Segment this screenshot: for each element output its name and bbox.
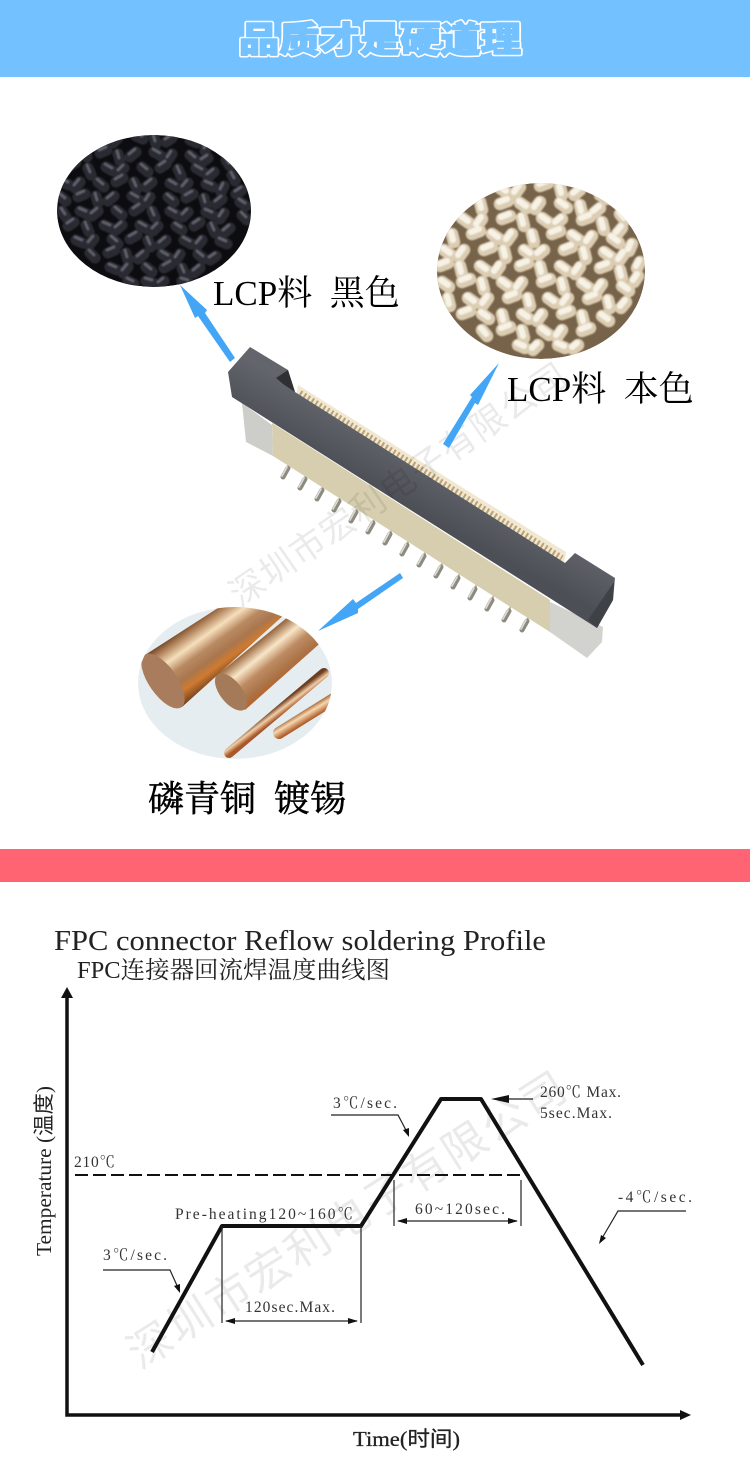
header banner bbox=[0, 0, 750, 77]
photo: natural LCP pellets bbox=[437, 181, 645, 359]
left metal tab bbox=[242, 403, 273, 456]
label preheat time: 120sec.Max. bbox=[245, 1299, 335, 1316]
photo: phosphor bronze rods bbox=[138, 607, 332, 759]
label cooling rate: -4℃/sec. bbox=[618, 1189, 692, 1206]
connector product photo bbox=[228, 347, 615, 658]
axes bbox=[61, 987, 691, 1420]
heading: quality title: 品质才是硬道理 bbox=[239, 21, 521, 60]
big copper rod bbox=[141, 607, 282, 708]
preheat dimension bbox=[222, 1226, 361, 1324]
label lower rate: 3℃/sec. bbox=[103, 1247, 167, 1264]
callout arrow peak bbox=[491, 1095, 533, 1103]
red divider band bbox=[0, 849, 750, 882]
dark actuator bar bbox=[228, 347, 615, 628]
callout leader cooling bbox=[599, 1211, 686, 1244]
x axis label: Time(时间) bbox=[353, 1427, 460, 1451]
cream contact strip bbox=[296, 385, 566, 565]
label upper rate: 3℃/sec. bbox=[333, 1095, 397, 1112]
chart: reflow soldering profile bbox=[32, 926, 692, 1451]
chart title: FPC connector Reflow soldering Profile bbox=[54, 926, 546, 957]
beige housing bbox=[272, 423, 550, 632]
y axis label: Temperature (温度) bbox=[32, 1086, 56, 1256]
label reflow time: 60~120sec. bbox=[415, 1201, 505, 1218]
thin copper rod bbox=[229, 673, 324, 753]
210 degree dashed line bbox=[75, 1174, 520, 1176]
arrow: to black pellets bbox=[180, 285, 235, 362]
second copper rod bbox=[214, 618, 318, 711]
label peak temperature: 260℃ Max. bbox=[540, 1084, 621, 1101]
short copper rod bbox=[279, 695, 340, 733]
right metal tab bbox=[550, 602, 603, 658]
label: black LCP: LCP料 黑色 bbox=[213, 274, 400, 313]
temperature curve bbox=[152, 1099, 643, 1365]
label peak time: 5sec.Max. bbox=[540, 1105, 612, 1122]
heading: quality title: 品质才是硬道理 bbox=[239, 21, 521, 60]
label: natural LCP: LCP料 本色 bbox=[507, 370, 694, 409]
watermark bottom: 深圳市宏利电子有限公司 bbox=[119, 1063, 576, 1378]
watermark top: 深圳市宏利电子有限公司 bbox=[222, 356, 574, 615]
arrow: to copper rods bbox=[318, 573, 403, 631]
photo: black LCP pellets bbox=[57, 133, 251, 287]
reflow dimension bbox=[394, 1180, 521, 1226]
label preheat: Pre-heating120~160℃ bbox=[175, 1206, 353, 1223]
actuator left notch bbox=[276, 370, 295, 392]
callout leader lower slope bbox=[103, 1270, 180, 1293]
chart subtitle: FPC连接器回流焊温度曲线图 bbox=[77, 957, 390, 984]
callout leader upper slope bbox=[331, 1115, 409, 1137]
actuator right end bbox=[588, 582, 614, 628]
label: phosphor bronze tin plated: 磷青铜 镀锡 bbox=[148, 779, 346, 819]
solder pins bbox=[282, 457, 531, 630]
label 210C: 210℃ bbox=[74, 1154, 115, 1171]
arrow: to natural pellets bbox=[443, 363, 499, 448]
